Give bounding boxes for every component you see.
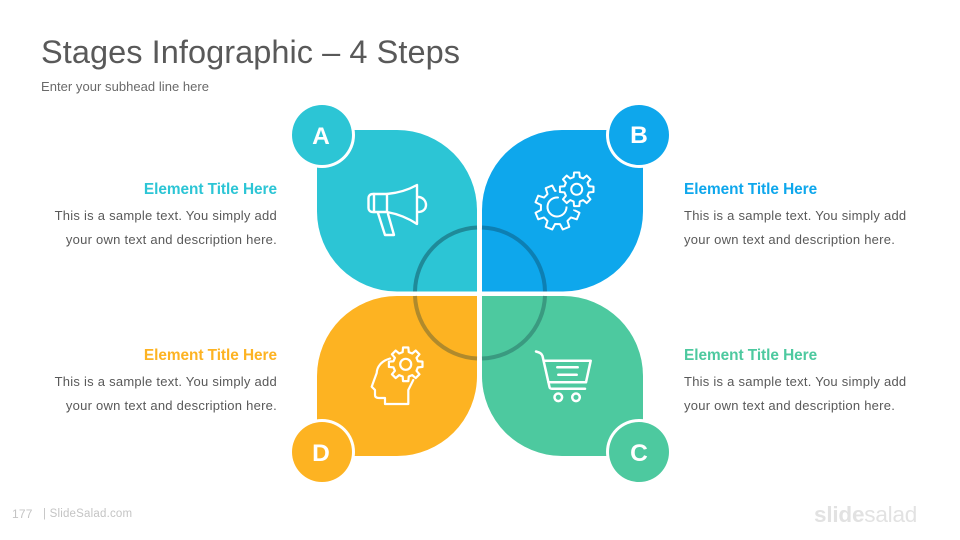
body A: your own text and description here. xyxy=(66,232,277,246)
text block B xyxy=(684,180,906,246)
title: Stages Infographic – 4 Steps xyxy=(41,34,460,70)
body A xyxy=(54,208,277,246)
icon: head with gear xyxy=(372,348,423,404)
site name: | SlideSalad.com xyxy=(43,508,132,520)
badge A: A xyxy=(312,123,330,150)
petal C xyxy=(482,296,643,456)
text block C xyxy=(684,346,906,412)
center ring B segment xyxy=(482,228,545,292)
petal D xyxy=(317,296,477,456)
logo wordmark: slidesalad xyxy=(814,502,917,527)
body B xyxy=(684,208,906,246)
text block A xyxy=(54,180,277,246)
badge D xyxy=(289,419,355,485)
body B: This is a sample text. You simply add xyxy=(684,208,906,222)
body A: This is a sample text. You simply add xyxy=(55,208,277,222)
badge C xyxy=(606,419,672,485)
heading C: Element Title Here xyxy=(684,346,817,364)
body C: This is a sample text. You simply add xyxy=(684,374,906,388)
body C xyxy=(684,374,906,412)
body D xyxy=(54,374,277,412)
heading D: Element Title Here xyxy=(144,346,277,364)
body D: This is a sample text. You simply add xyxy=(55,374,277,388)
subhead: Enter your subhead line here xyxy=(41,79,209,94)
center ring C segment xyxy=(482,296,545,358)
body B: your own text and description here. xyxy=(684,232,895,246)
heading A: Element Title Here xyxy=(144,180,277,198)
body D: your own text and description here. xyxy=(66,398,277,412)
badge B: B xyxy=(630,122,648,149)
petal B xyxy=(482,130,643,292)
center ring A segment xyxy=(415,228,477,292)
petal A xyxy=(317,130,477,292)
icon: gears xyxy=(528,172,594,237)
text block D xyxy=(54,346,277,412)
badge B xyxy=(606,102,672,168)
heading B: Element Title Here xyxy=(684,180,817,198)
badge D: D xyxy=(312,440,330,467)
center ring D segment xyxy=(415,296,477,358)
icon: megaphone xyxy=(368,185,426,235)
badge A xyxy=(289,102,355,168)
badge C: C xyxy=(630,440,648,467)
body C: your own text and description here. xyxy=(684,398,895,412)
page number: 177 xyxy=(12,507,33,521)
icon: shopping cart xyxy=(536,352,591,401)
